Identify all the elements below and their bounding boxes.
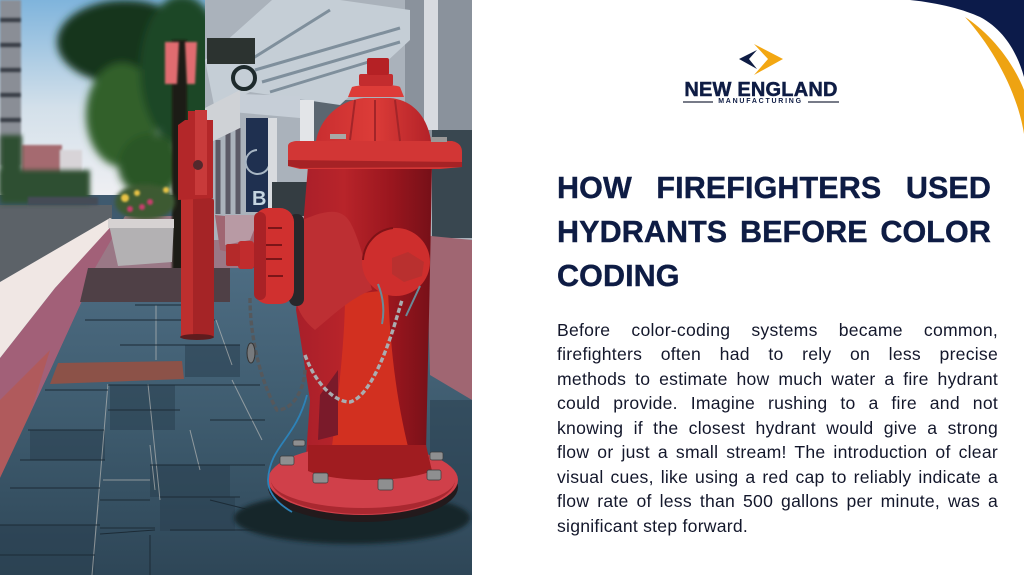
base shadow xyxy=(234,492,470,544)
side nozzle xyxy=(226,208,372,330)
planter with flowers xyxy=(108,184,175,266)
body text: visual cues, like using a red cap to reliably indicate a xyxy=(557,467,998,487)
far pavement xyxy=(95,216,240,268)
sky xyxy=(0,0,240,215)
darker paving stones xyxy=(0,345,472,575)
corner swoosh: navy and gold xyxy=(910,0,1024,134)
storefront sign xyxy=(207,38,255,64)
photo: red fire hydrant on brick sidewalk xyxy=(0,0,472,575)
heading: HYDRANTS BEFORE COLOR xyxy=(557,215,991,249)
logo: New England Manufacturing xyxy=(683,44,839,105)
left building xyxy=(0,0,98,205)
body text: Before color-coding systems became common, xyxy=(557,320,998,340)
heading: CODING xyxy=(557,259,680,293)
body text: could provide. Imagine rushing to a fire and not xyxy=(557,393,998,413)
drain plate xyxy=(50,361,184,384)
blue wire xyxy=(268,395,307,512)
white road stripe xyxy=(0,218,116,358)
right brick zone xyxy=(215,215,472,400)
right storefront building: B xyxy=(252,188,266,210)
main hydrant xyxy=(226,58,462,522)
body text: knowing if the closest hydrant would give a strong xyxy=(557,418,998,438)
body text: significant step forward. xyxy=(557,516,748,536)
pink curb strip xyxy=(0,220,135,478)
heading: HOW FIREFIGHTERS USED xyxy=(557,171,991,205)
street and background xyxy=(0,195,472,575)
dome xyxy=(316,98,431,141)
background red bollard xyxy=(178,110,214,340)
body text: flow rate of less than 500 gallons per minute, was a xyxy=(557,491,998,511)
hydrant base flange xyxy=(268,452,458,522)
navy curve xyxy=(910,0,1024,77)
tree canopy xyxy=(57,0,224,197)
distant flags xyxy=(165,42,197,84)
gold curve xyxy=(965,17,1024,134)
logo tagline: MANUFACTURING xyxy=(718,98,803,105)
body text: firefighters often had to rely on less precise xyxy=(557,344,998,364)
body text: methods to estimate how much water a fire hydrant xyxy=(557,369,998,389)
chains xyxy=(247,298,402,512)
front nozzle cap xyxy=(362,228,430,324)
sidewalk paving xyxy=(0,215,472,575)
tree trunk xyxy=(172,40,187,285)
flange bolts xyxy=(280,440,443,490)
hydrant barrel xyxy=(296,166,432,455)
logo wordmark: NEW ENGLAND xyxy=(684,79,838,101)
body text: flow or just a small stream! The introduction of clear xyxy=(557,442,998,462)
hydrant bonnet flange xyxy=(288,141,462,169)
bonnet collar xyxy=(348,85,404,97)
right storefront building xyxy=(205,0,472,240)
heading xyxy=(557,171,991,293)
body text xyxy=(557,320,998,536)
logo mark: chevrons xyxy=(739,44,783,75)
road xyxy=(0,205,112,282)
